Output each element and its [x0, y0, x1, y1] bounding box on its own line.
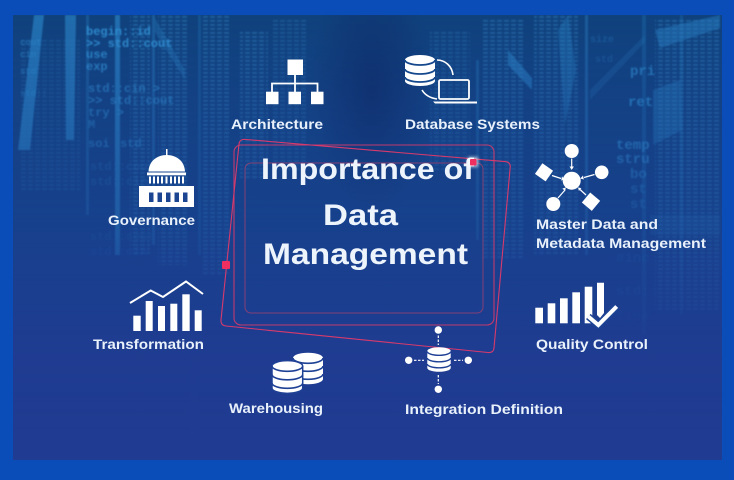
background code fragments: std	[120, 137, 142, 151]
frame: outer tilted rectangle	[221, 139, 510, 353]
title: Importance of	[261, 153, 475, 186]
panel: centre frames	[221, 139, 510, 353]
background code fragments: begin::id	[86, 25, 151, 39]
icon: hub and spokes	[535, 144, 608, 211]
item: Quality Control	[535, 283, 648, 352]
background code fragments: >> std::cout	[88, 94, 174, 108]
background code fragments: std::cin >	[88, 82, 160, 96]
title: Management	[263, 238, 468, 271]
label: Architecture	[231, 116, 323, 132]
label: Integration Definition	[405, 401, 563, 417]
background code fragments: temp	[616, 138, 650, 154]
label: Master Data and	[536, 216, 658, 232]
label: Governance	[108, 212, 195, 228]
icon: capitol building	[139, 149, 194, 207]
background code fragments: bo	[630, 167, 647, 183]
background code fragments: std::cin	[90, 245, 148, 259]
item: Master Data and Metadata Management: Metadata Management	[536, 235, 706, 251]
background code fragments: std::	[20, 89, 47, 99]
marker: red square on top right	[468, 157, 478, 167]
background code fragments: cin	[20, 50, 36, 60]
frame: middle rectangle	[234, 145, 494, 325]
background code fragments: st	[630, 182, 647, 198]
item: Master Data and Metadata Management	[535, 144, 706, 251]
label: Database Systems	[405, 116, 540, 132]
background code fragments: fina	[616, 309, 650, 325]
background code fragments: std::cout	[90, 160, 155, 174]
background code fragments: std::cout	[90, 230, 155, 244]
background code fragments: #inc	[616, 251, 650, 267]
icon: database and laptop	[405, 55, 477, 104]
marker: red square on left	[222, 261, 230, 269]
label: Warehousing	[229, 400, 323, 416]
background code fragments: size	[590, 34, 614, 46]
background code fragments	[20, 26, 655, 208]
item: Warehousing	[229, 353, 323, 416]
item: Governance	[108, 149, 195, 228]
background code fragments: soi	[88, 137, 110, 151]
frame: inner rectangle	[245, 163, 483, 313]
icon: two database stacks	[272, 353, 323, 393]
background code fragments: std	[20, 67, 36, 77]
title	[261, 153, 475, 271]
item: Architecture	[231, 60, 324, 132]
background code fragments: use	[86, 48, 108, 62]
icon: bar chart with trend line	[130, 282, 203, 331]
background code fragments: pri	[630, 64, 655, 80]
background code fragments: stru	[616, 152, 650, 168]
icon: database with four connections	[405, 326, 472, 393]
item: Database Systems	[405, 55, 540, 132]
background code fragments: try >	[88, 106, 124, 120]
title: Data	[323, 199, 398, 232]
icon: hierarchy	[266, 60, 324, 104]
background code fragments: std::cin	[90, 175, 148, 189]
background code fragments: >> std::cout	[86, 37, 172, 51]
background code fragments: M	[88, 118, 95, 132]
background code fragments: cout	[20, 38, 42, 48]
background code fragments: st	[630, 197, 647, 213]
background code fragments: ret	[628, 95, 653, 111]
item: Integration Definition	[405, 326, 563, 417]
item: Transformation	[93, 282, 204, 352]
label: Transformation	[93, 336, 204, 352]
background code fragments: std::	[616, 284, 658, 300]
icon: bars with check mark	[535, 283, 617, 325]
background code fragments: std	[595, 54, 613, 66]
label: Quality Control	[536, 336, 648, 352]
background code fragments: exp	[86, 60, 108, 74]
